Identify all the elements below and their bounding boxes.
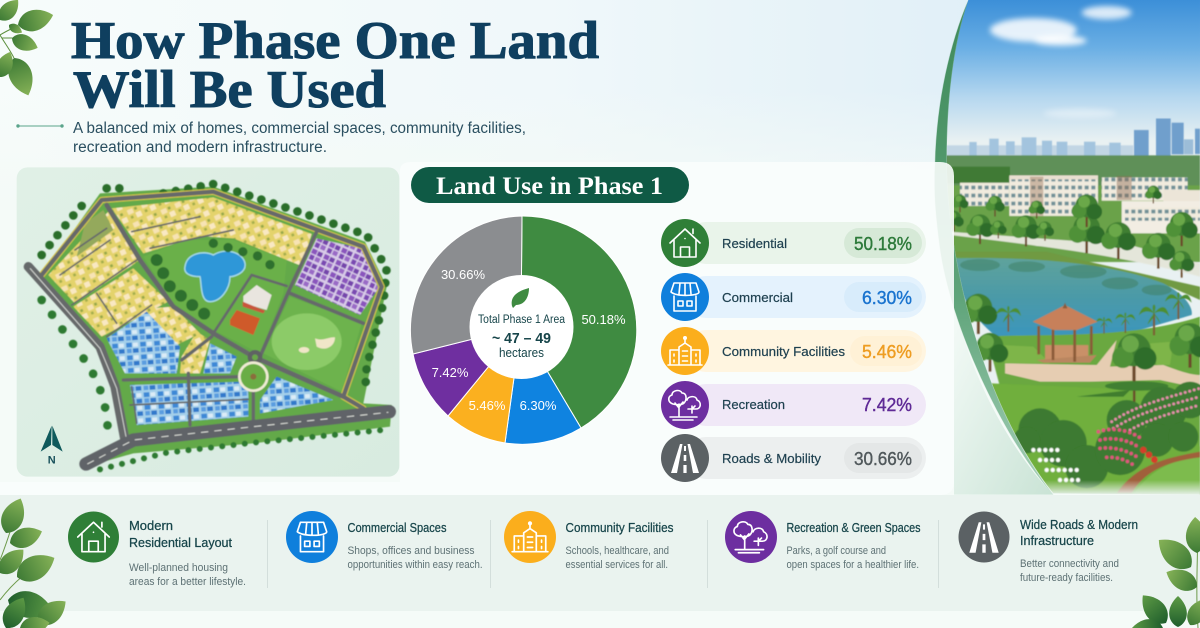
- leaves: bottom right: [1132, 517, 1200, 628]
- heading pill: Land Use in Phase 1: [411, 167, 689, 203]
- legend: roads and mobility: Roads & Mobility: [722, 451, 821, 466]
- feature: modern residential layout: [68, 512, 246, 588]
- legend: residential: Residential: [722, 236, 787, 251]
- legend: recreation: [661, 381, 926, 429]
- feature: community facilities: Schools, healthcare, and: [566, 545, 669, 557]
- leaves: bottom left: [0, 494, 72, 628]
- golf: [263, 297, 362, 392]
- feature: community facilities: essential services for all.: [566, 559, 668, 571]
- donut centre: total area: Total Phase 1 Area: [478, 314, 566, 326]
- legend: commercial: Commercial: [722, 290, 793, 305]
- green crescent accent: [934, 0, 1053, 495]
- segment: recreation: [413, 327, 521, 416]
- leaves: top left: [0, 0, 56, 99]
- feature: recreation and green spaces: Parks, a golf course and: [786, 545, 886, 557]
- donut value labels: 5.46%: [469, 398, 506, 413]
- feature: commercial spaces: Shops, offices and business: [348, 545, 475, 557]
- donut value labels: 6.30%: [520, 398, 557, 413]
- legend: community facilities: 5.46%: [862, 341, 912, 362]
- legend: commercial: 6.30%: [862, 287, 912, 308]
- legend: community facilities: [661, 327, 926, 375]
- feature: wide roads and modern infrastructure: Infrastructure: [1020, 533, 1094, 548]
- feature: recreation and green spaces: open spaces for a healthier life.: [786, 559, 919, 571]
- feature: wide roads and modern infrastructure: [958, 512, 1138, 584]
- donut chart: [410, 216, 637, 444]
- white central panel: [0, 162, 954, 495]
- segment: roads and mobility: [410, 216, 522, 354]
- feature: commercial spaces: Commercial Spaces: [348, 520, 447, 535]
- legend: commercial: [661, 273, 926, 321]
- icon: north arrow: N: [48, 454, 56, 466]
- lots: [112, 197, 312, 266]
- icon: north arrow: [41, 426, 63, 466]
- donut centre: total area: hectares: [499, 346, 544, 360]
- subtitle: recreation and modern infrastructure.: [73, 139, 327, 156]
- feature: recreation and green spaces: Recreation & Green Spaces: [786, 520, 921, 535]
- legend: recreation: Recreation: [722, 397, 785, 412]
- feature: modern residential layout: areas for a better lifestyle.: [129, 576, 246, 588]
- donut value labels: 7.42%: [432, 365, 469, 380]
- legend: roads and mobility: 30.66%: [854, 448, 912, 469]
- donut value labels: [432, 267, 626, 413]
- segment: community facilities: [448, 327, 521, 443]
- panel: site master plan map: [17, 167, 399, 477]
- heading pill: Land Use in Phase 1: Land Use in Phase 1: [436, 173, 663, 200]
- legend: community facilities: Community Facilities: [722, 344, 846, 359]
- park: [178, 302, 260, 332]
- bottom feature band background: [0, 495, 1200, 611]
- feature: wide roads and modern infrastructure: Wide Roads & Modern: [1020, 517, 1138, 532]
- feature: commercial spaces: opportunities within easy reach.: [348, 559, 482, 571]
- legend: residential: [661, 219, 926, 267]
- donut value labels: 30.66%: [441, 267, 485, 282]
- community buildings: [243, 285, 272, 310]
- legend: roads and mobility: [661, 434, 926, 482]
- title: How Phase One Land: [71, 12, 599, 70]
- feature: recreation and green spaces: [725, 511, 921, 571]
- segment: commercial: [505, 327, 581, 444]
- ground: [25, 187, 392, 467]
- lake: [185, 251, 245, 302]
- feature: community facilities: Community Facilities: [566, 520, 674, 535]
- gazebo: [1033, 303, 1098, 363]
- hero photo: lakeside community: [930, 0, 1200, 500]
- legend: recreation: 7.42%: [862, 394, 912, 415]
- roads: [28, 192, 389, 464]
- title: Will Be Used: [73, 61, 386, 119]
- feature: modern residential layout: Modern: [129, 518, 173, 533]
- feature: wide roads and modern infrastructure: future-ready facilities.: [1020, 572, 1113, 584]
- decorative arrow line for subtitle: [17, 125, 63, 127]
- feature: modern residential layout: Well-planned housing: [129, 562, 228, 574]
- roundabouts: [248, 350, 262, 365]
- donut value labels: 50.18%: [581, 312, 626, 327]
- feature: wide roads and modern infrastructure: Better connectivity and: [1020, 558, 1119, 570]
- feature: community facilities: [504, 511, 674, 571]
- subtitle: [73, 120, 526, 156]
- tree rows: [42, 184, 387, 469]
- donut centre: total area: ~ 47 – 49: [492, 330, 551, 347]
- legend: residential: 50.18%: [854, 233, 912, 254]
- donut centre: total area: [478, 288, 566, 360]
- feature: commercial spaces: [286, 511, 482, 571]
- segment: residential: [521, 216, 637, 428]
- subtitle: A balanced mix of homes, commercial spaces, community facilities,: [73, 120, 526, 137]
- title: [71, 12, 599, 119]
- feature: modern residential layout: Residential Layout: [129, 535, 232, 550]
